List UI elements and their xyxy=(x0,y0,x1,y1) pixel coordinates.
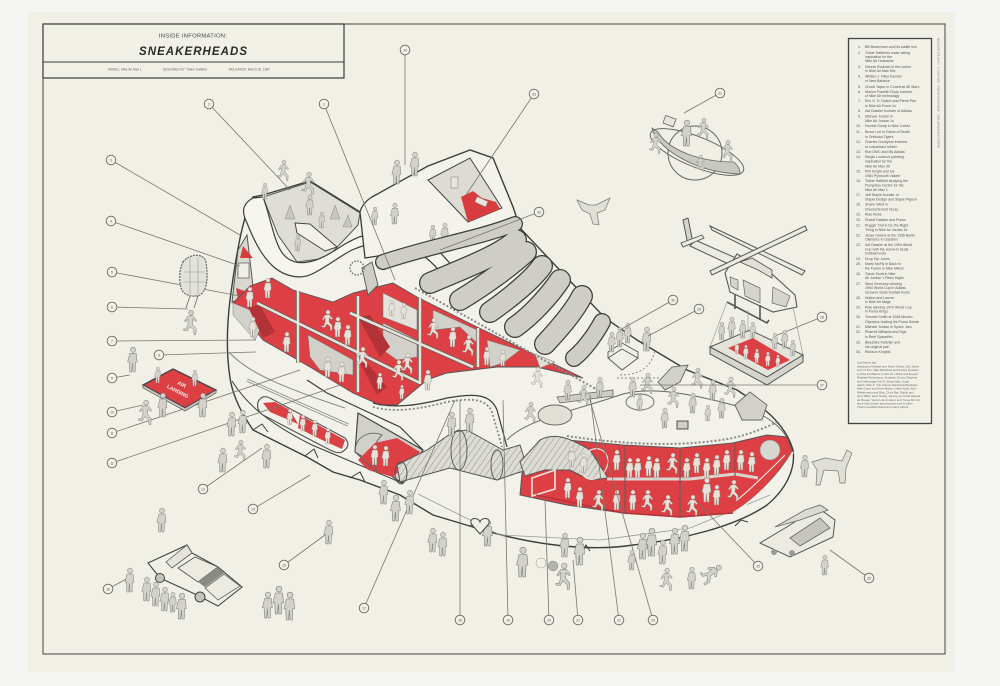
legend panel: 26. xyxy=(856,272,861,276)
legend panel: 33. xyxy=(856,340,861,344)
numbered callouts: 1 xyxy=(323,102,325,106)
legend panel: Nike Air Max 95 xyxy=(865,164,890,168)
legend panel: of Nike Air technology xyxy=(865,94,900,98)
numbered callouts: 5 xyxy=(111,270,113,274)
legend panel: inspiration for the xyxy=(865,55,892,59)
legend panel: of New Balance xyxy=(865,79,890,83)
numbered callouts: 8 xyxy=(158,353,160,357)
numbered callouts: 9 xyxy=(111,376,113,380)
legend panel: in Nike Air Force 1s xyxy=(865,104,896,108)
legend panel: Nike Grant and Kevin Barton, Mark Adolf, Alex xyxy=(857,387,917,391)
front red cutaway xyxy=(520,435,793,517)
legend panel: 20. xyxy=(856,218,861,222)
legend panel: Nike Air Huarache xyxy=(865,59,894,63)
legend panel: in Kats and Metric X, Eric PL, AFAK and Doepic xyxy=(857,372,919,376)
planet xyxy=(645,116,749,185)
walkway tube xyxy=(395,430,528,484)
legend panel: 11. xyxy=(856,130,861,134)
numbered callouts: 6 xyxy=(111,305,113,309)
numbered callouts: 33 xyxy=(532,92,536,96)
numbered callouts: 11 xyxy=(110,431,114,435)
legend panel: Thing in Nike Air Jordan 4s xyxy=(865,228,908,232)
horse rider xyxy=(812,450,852,485)
legend panel: 15. xyxy=(856,170,861,174)
legend panel: 31. xyxy=(856,325,861,329)
legend panel: 27. xyxy=(856,282,861,286)
legend panel: Jeff Staple founder of xyxy=(865,193,899,197)
legend panel: and Gatecrage Yuki S, Sergo Man, Ange xyxy=(857,379,909,383)
legend panel: Amy Miller, Hero Nosky, Jeremy Lord and Helena xyxy=(857,394,920,398)
legend panel: Marty McFly in Back to xyxy=(865,262,901,266)
legend panel: of vulcanised rubber xyxy=(865,145,898,149)
cupid xyxy=(577,198,610,225)
legend panel: Tinker Hatfield's water skiing xyxy=(865,51,910,55)
legend panel: Ruggin' Out in Do the Right xyxy=(865,223,908,227)
legend panel: 17. xyxy=(856,193,861,197)
numbered callouts xyxy=(103,45,874,625)
numbered callouts: 31 xyxy=(718,91,722,95)
legend panel: 6. xyxy=(858,90,861,94)
legend panel: 1. xyxy=(858,45,861,49)
leader lines xyxy=(108,50,869,620)
legend panel: Jesse Owens at the 1936 Berlin xyxy=(865,234,915,238)
legend panel: Olympics in Dasslers xyxy=(865,238,898,242)
legend panel: 14. xyxy=(856,155,861,159)
legend panel: Drop Top Jones xyxy=(865,257,890,261)
legend panel: Dennis Rodman in the corner xyxy=(865,65,912,69)
legend panel: Wintermann and Rico, Chris Bar, Diablo and xyxy=(857,390,914,394)
numbered callouts: 25 xyxy=(756,564,760,568)
numbered callouts: 14 xyxy=(251,507,255,511)
title block: SNEAKERHEADS xyxy=(139,46,247,58)
crowd figures around the shoe xyxy=(125,152,828,620)
numbered callouts: 34 xyxy=(403,48,407,52)
midsole lines and stitching xyxy=(229,288,787,551)
numbered callouts: 20 xyxy=(547,618,551,622)
legend panel: Chuck Taylor in Converse All Stars xyxy=(865,85,920,89)
legend panel: and Lil' Kim, Nike Moreland and Kenley Duxston xyxy=(857,368,919,372)
legend panel: 5. xyxy=(858,85,861,89)
heart logo xyxy=(471,519,489,534)
legend panel: 23. xyxy=(856,243,861,247)
numbered callouts: 26 xyxy=(867,576,871,580)
numbered callouts: 29 xyxy=(697,307,701,311)
legend panel: Rudolf Dassler and Puma xyxy=(865,218,905,222)
legend panel: Run DMC and My Adidas xyxy=(865,150,905,154)
legend panel: Staple Design and Staple Pigeon xyxy=(865,198,917,202)
legend panel: Air Jordan 1 Retro Highs xyxy=(865,276,904,280)
legend panel: Chucks/Grand Yeezy xyxy=(865,208,898,212)
legend panel: Pompidou Centre for the xyxy=(865,184,904,188)
legend panel: football boots xyxy=(865,252,886,256)
legend panel: Nike Air Jordan 1s xyxy=(865,119,894,123)
heel band xyxy=(244,197,455,278)
legend panel: his original pair xyxy=(865,345,890,349)
title block: INSIDE INFORMATION: xyxy=(159,34,227,40)
legend panel: Bikeshire Kalenjin and xyxy=(865,340,900,344)
legend panel: Forrest Gump in Nike Cortez xyxy=(865,124,910,128)
legend panel: Raphael Rousseaux, Anarkick, Donny Draymer xyxy=(857,376,917,380)
legend panel: Shane West in xyxy=(865,202,888,206)
legend panel: West Germany winning xyxy=(865,282,902,286)
legend panel: characters Michael and Kevin Yellow, Otis Jones xyxy=(857,364,920,368)
legend panel: screw-in studs football boots xyxy=(865,290,910,294)
legend panel: 34. xyxy=(856,350,861,354)
lace eyelet tab xyxy=(350,261,378,295)
legend panel: 1964 Plymouth Valiant xyxy=(865,174,900,178)
shoe silhouette xyxy=(227,150,793,548)
delorean xyxy=(760,505,835,557)
numbered callouts: 22 xyxy=(617,618,621,622)
legend panel: Adi Dassler at the 1954 World xyxy=(865,243,912,247)
legend panel: 21. xyxy=(856,223,861,227)
side heel wall xyxy=(232,235,254,302)
legend panel: 12. xyxy=(856,140,861,144)
legend panel: Olympics holding his Puma Suede xyxy=(865,320,919,324)
legend panel: 3. xyxy=(858,65,861,69)
legend panel: in Puma Kings xyxy=(865,310,888,314)
numbered callouts: 7 xyxy=(111,339,113,343)
numbered callouts: 12 xyxy=(110,461,114,465)
vertical printer note: INSIDE INFORMATION · SNEAKERHEADS · AIR MAX 1 · LIMITED EDITION xyxy=(938,38,940,148)
mid sole window xyxy=(355,413,423,483)
legend panel: Pele winning 1970 World Cup xyxy=(865,306,912,310)
legend panel: in Reef Spaceflex xyxy=(865,335,893,339)
legend panel: the Future in Nike MAGs xyxy=(865,266,904,270)
legend panel: Lost Name tag: xyxy=(857,360,877,364)
collar interior scene xyxy=(263,182,360,262)
legend panel: 19. xyxy=(856,212,861,216)
legend panel: Theo's excellent friend and many others. xyxy=(857,405,909,409)
legend panel: Rise Kicks xyxy=(865,212,882,216)
tongue and window xyxy=(360,150,520,258)
numbered callouts: 15 xyxy=(282,563,286,567)
parachute waffle xyxy=(180,255,207,308)
legend panel: 28. xyxy=(856,296,861,300)
legend panel: inspiration for the xyxy=(865,160,892,164)
legend panel: 16. xyxy=(856,179,861,183)
legend panel: Eric O. H. Dalton and Pierre Pan xyxy=(865,99,916,103)
helicopter xyxy=(681,218,807,355)
legend panel: 7. xyxy=(858,99,861,103)
legend panel: Charles Goodyear inventor xyxy=(865,140,908,144)
numbered callouts: 2 xyxy=(208,102,210,106)
numbered callouts: 30 xyxy=(671,298,675,302)
air landing mat: LANDING xyxy=(166,384,189,400)
legend panel: Cup with the screw-in studs xyxy=(865,248,909,252)
title block: RELEASED: March 26, 1987 xyxy=(229,68,270,72)
legend panel: 29. xyxy=(856,306,861,310)
legend panel: Bill Bowerman and his waffle iron xyxy=(865,45,917,49)
legend panel: Nike Air Max 1 xyxy=(865,188,888,192)
air capsule xyxy=(258,397,348,453)
legend panel: Hutton and Lauren xyxy=(865,296,894,300)
legend panel: 24. xyxy=(856,257,861,261)
legend panel: Rickson Knights xyxy=(865,350,891,354)
legend panel: 10. xyxy=(856,124,861,128)
legend panel: 8. xyxy=(858,109,861,113)
title block xyxy=(43,24,344,78)
legend panel: Jakob, Dick Z, The Unholy Rhetorical Bondings xyxy=(857,383,918,387)
air landing mat: AIR xyxy=(176,380,187,390)
toe-top scene xyxy=(524,323,767,429)
numbered callouts: 19 xyxy=(506,618,510,622)
legend panel: 32. xyxy=(856,330,861,334)
numbered callouts: 3 xyxy=(110,158,112,162)
legend panel: 18. xyxy=(856,202,861,206)
legend panel: in Nike Air Mags xyxy=(865,300,891,304)
legend panel: 1954 World Cup in Adidas xyxy=(865,286,906,290)
legend panel: 25. xyxy=(856,262,861,266)
numbered callouts: 18 xyxy=(458,618,462,622)
numbered callouts: 27 xyxy=(820,383,824,387)
legend panel: Michael Jordan in xyxy=(865,114,893,118)
legend panel: 9. xyxy=(858,114,861,118)
legend panel: Sergio Lozano's painting xyxy=(865,155,904,159)
legend panel: 2. xyxy=(858,51,861,55)
numbered callouts: 17 xyxy=(362,606,366,610)
legend panel: 30. xyxy=(856,315,861,319)
legend panel: Bruce Lee in Game of Death xyxy=(865,130,910,134)
legend panel: Marion Franklin Rudy inventor xyxy=(865,90,913,94)
numbered callouts: 10 xyxy=(110,410,114,414)
legend panel: in Onitsuka Tigers xyxy=(865,135,894,139)
legend panel: Tinker Hatfield studying the xyxy=(865,179,908,183)
legend panel: in Nike Air Max 90s xyxy=(865,69,896,73)
legend panel: Phil Knight and his xyxy=(865,170,895,174)
legend panel: 13. xyxy=(856,150,861,154)
numbered callouts: 16 xyxy=(106,587,110,591)
main red cutaway xyxy=(233,278,583,405)
legend panel xyxy=(848,38,932,424)
numbered callouts: 23 xyxy=(651,618,655,622)
laces xyxy=(383,224,602,358)
suspended crowd platform xyxy=(710,317,803,385)
legend panel: 4. xyxy=(858,74,861,78)
numbered callouts: 21 xyxy=(576,618,580,622)
legend panel: Travis Scott in Nike xyxy=(865,272,895,276)
numbered callouts: 28 xyxy=(820,315,824,319)
numbered callouts: 4 xyxy=(110,219,112,223)
legend panel: fame has chosen and received and to them xyxy=(857,402,913,406)
legend panel: Pharrell Williams and Sign xyxy=(865,330,906,334)
legend panel: Michael Jordan in Space Jam xyxy=(865,325,912,329)
numbered callouts: 32 xyxy=(537,210,541,214)
legend panel: 22. xyxy=(856,234,861,238)
numbered callouts: 13 xyxy=(201,487,205,491)
legend panel: Adi Dassler founder of Adidas xyxy=(865,109,912,113)
legend panel: William J. Riley founder xyxy=(865,74,903,78)
classic car xyxy=(148,545,242,606)
legend panel: de Rouge, Yasmin de Armand, and Yuma Sill. Art xyxy=(857,398,920,402)
air landing mat xyxy=(143,369,216,411)
legend panel: Tommie Smith at 1968 Mexico xyxy=(865,315,913,319)
title block: DESIGNED BY: Tinker Hatfield xyxy=(163,68,207,72)
title block: MODEL: Nike Air Max 1 xyxy=(108,68,142,72)
